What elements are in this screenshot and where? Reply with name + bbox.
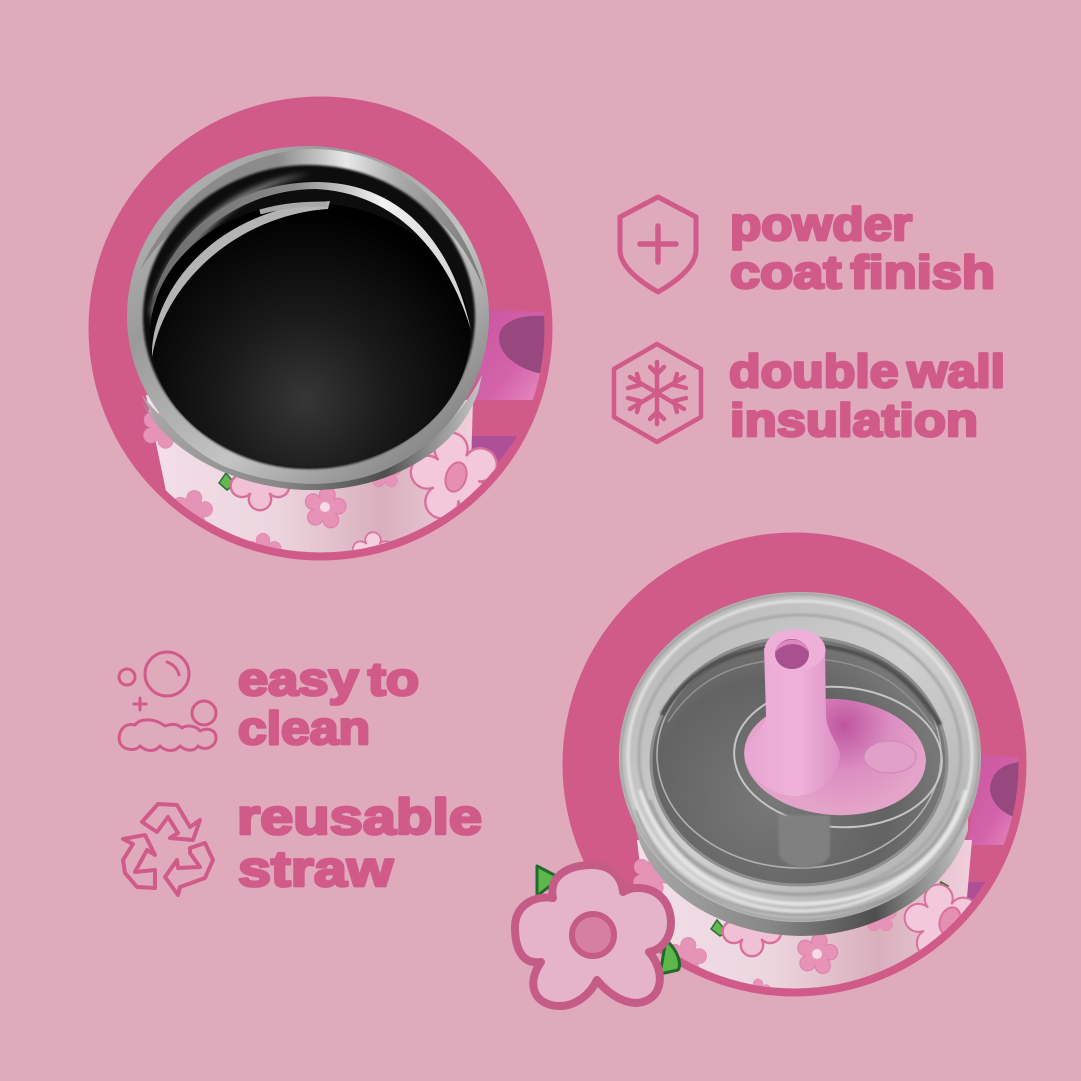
feature: double wall insulation [614, 344, 1005, 446]
printed sleeve [637, 840, 972, 1000]
feature: easy to clean [119, 652, 419, 754]
upper left inner shading [150, 174, 310, 330]
steel band under lid [636, 800, 968, 936]
decorative flower badge [515, 865, 680, 1006]
rim front band [142, 375, 482, 490]
heading: powder coat finish [730, 198, 995, 298]
lid ring grooves [621, 594, 979, 920]
rim front band lower lip [142, 385, 480, 490]
lid outer ring [619, 592, 981, 922]
handle upper segment [474, 310, 546, 400]
inner ring highlights [657, 642, 947, 868]
printed sleeve [146, 395, 473, 570]
heading: reusable straw: reusable [237, 789, 482, 845]
petals [515, 865, 671, 1006]
badge circle: top [88, 96, 552, 560]
icon: shield with plus [620, 197, 696, 292]
flower pattern [633, 859, 972, 987]
rim top highlight [140, 149, 484, 290]
straw reflection [778, 815, 830, 868]
icon: recycle arrows [123, 804, 213, 895]
handle upper segment [967, 755, 1022, 845]
leaf: upper [537, 866, 560, 896]
interior well [150, 203, 470, 467]
steel rim [127, 146, 489, 486]
inner wall [143, 165, 475, 469]
heading: double wall insulation: double wall [729, 345, 1005, 397]
handle lower segment [967, 882, 985, 906]
tumbler body with handle [137, 310, 546, 571]
feature: powder coat finish [620, 197, 995, 298]
feature: reusable straw [123, 789, 482, 897]
heading: easy to clean [238, 653, 419, 754]
heading: double wall insulation: insulation [730, 394, 978, 446]
flower pattern [143, 412, 498, 550]
heading: double wall insulation [729, 345, 1005, 446]
flower centre [572, 914, 614, 956]
panel: open tumbler photo [88, 96, 552, 571]
disc vent oval [864, 741, 916, 773]
handle lower segment [472, 436, 517, 492]
heading: reusable straw: straw [238, 841, 393, 897]
thread highlights [152, 182, 471, 357]
icon: soap bubbles [119, 652, 216, 750]
heading: powder coat finish: powder [730, 198, 912, 250]
heading: powder coat finish: coat finish [730, 246, 995, 298]
panel: lid and straw photo [562, 532, 1026, 1004]
heading: reusable straw [237, 789, 482, 897]
heading: easy to clean: clean [238, 702, 370, 754]
leaf: lower [660, 940, 680, 974]
badge circle: bottom [562, 532, 1026, 996]
straw [745, 629, 840, 796]
tumbler body with handle and lid [627, 755, 1022, 1004]
pink disc [740, 693, 930, 821]
lid inner well [651, 637, 947, 885]
heading: easy to clean: easy to [238, 653, 419, 705]
icon: hexagon with snowflake [614, 344, 701, 442]
